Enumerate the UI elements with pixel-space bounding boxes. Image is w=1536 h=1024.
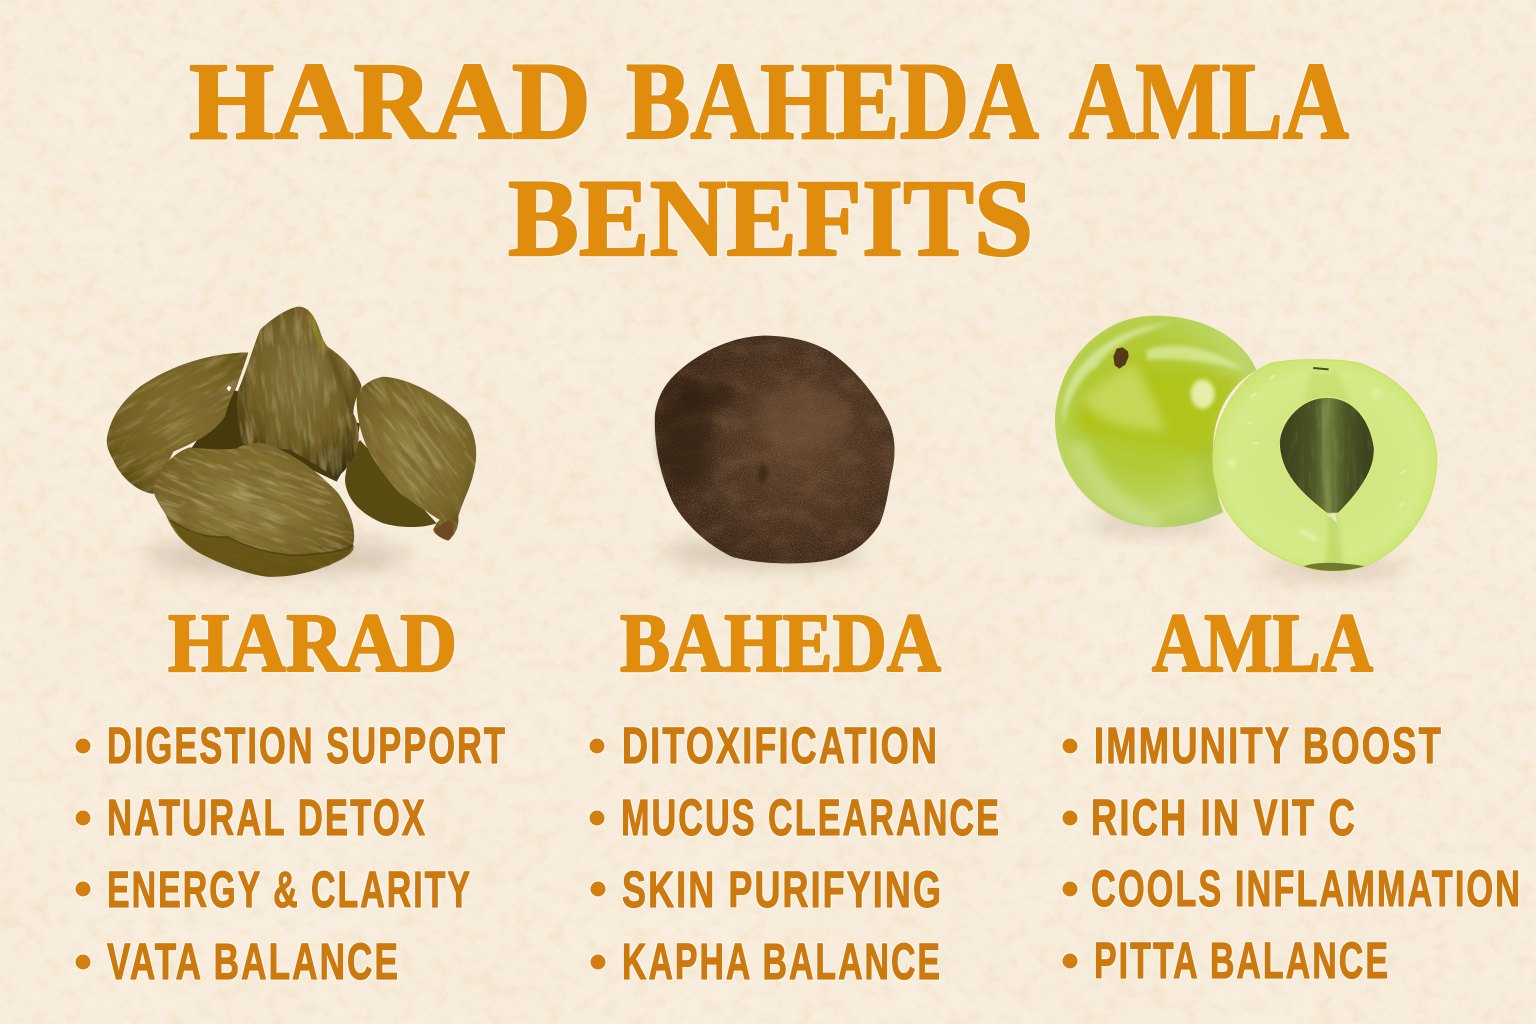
list: amla benefits: PITTA BALANCE	[1094, 932, 1390, 989]
list: baheda benefits: MUCUS CLEARANCE	[621, 789, 1001, 846]
title: BAHEDA	[626, 40, 1039, 162]
list: harad benefits: VATA BALANCE	[107, 933, 400, 990]
list: harad benefits	[76, 717, 507, 990]
list: baheda benefits: SKIN PURIFYING	[622, 861, 943, 918]
title	[189, 40, 1349, 279]
title: BENEFITS	[508, 157, 1033, 279]
panel: amla	[1055, 315, 1522, 989]
title: HARAD	[189, 40, 591, 162]
panel: harad	[74, 306, 506, 981]
list: baheda benefits: KAPHA BALANCE	[622, 933, 942, 990]
title: AMLA	[1069, 40, 1349, 162]
list: baheda benefits	[590, 717, 1001, 990]
list: amla benefits	[1062, 717, 1522, 989]
heading: amla: AMLA	[1152, 597, 1373, 690]
image: baheda nut	[655, 336, 895, 567]
panel: baheda	[590, 336, 1001, 990]
list: harad benefits: NATURAL DETOX	[107, 789, 427, 846]
image: amla fruits	[1055, 315, 1465, 591]
heading: baheda: BAHEDA	[620, 597, 941, 690]
heading: harad: HARAD	[168, 597, 457, 690]
list: harad benefits: ENERGY & CLARITY	[107, 861, 472, 918]
image: harad fruits	[106, 306, 476, 585]
list: amla benefits: RICH IN VIT C	[1091, 789, 1357, 846]
list: harad benefits: DIGESTION SUPPORT	[107, 717, 507, 774]
list: baheda benefits: DITOXIFICATION	[622, 717, 939, 774]
